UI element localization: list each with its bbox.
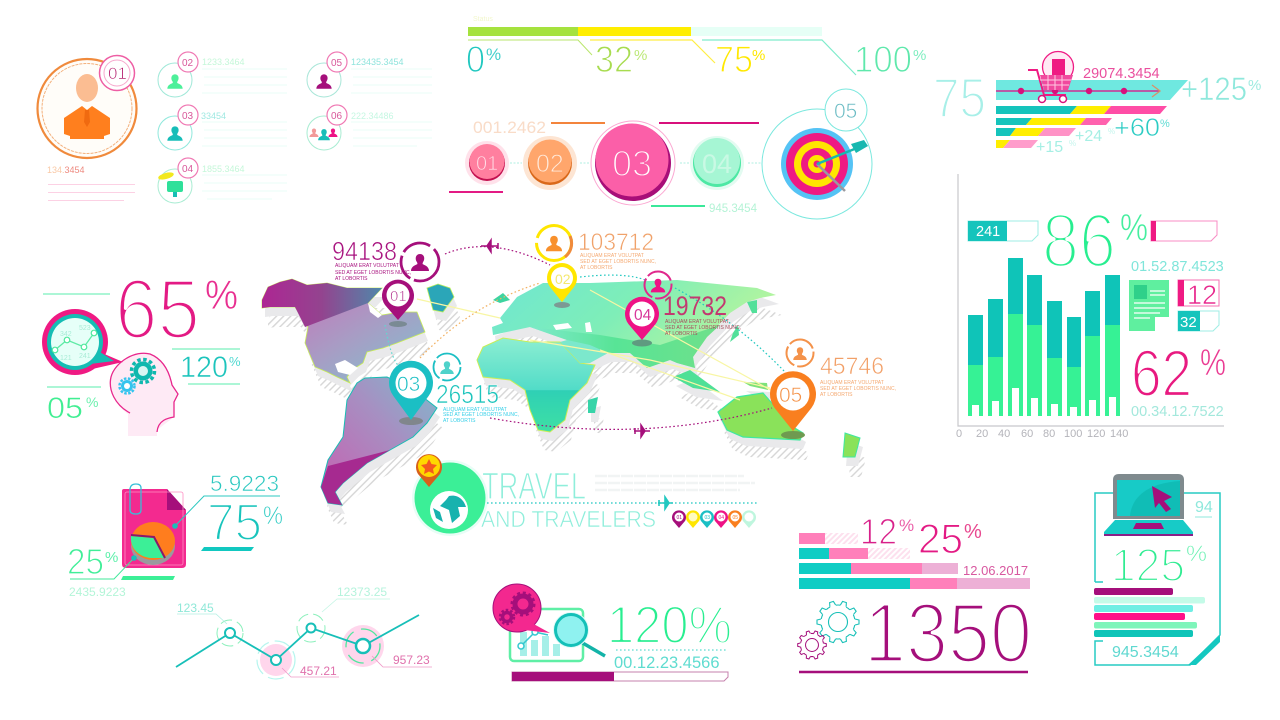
map shadow [265,288,866,525]
value: 05%: 05 [47,392,83,425]
step 02 [523,136,577,190]
label: 19732: SED AT EGET LOBORTIS NUNC, [665,325,741,331]
label: 45746: SED AT EGET LOBORTIS NUNC, [820,386,896,392]
icon: target with arrow [762,109,872,219]
label: 123.45: 123.45 [177,601,214,615]
label: 19732: ALIQUAM ERAT VOLUTPAT [665,319,729,325]
item 04 [157,158,287,203]
value: 100% [702,39,926,80]
item 03: 33454 [201,111,226,121]
bar chart: 100 [1064,428,1082,440]
panel: shopping bars [933,52,1261,156]
value: +24% [1075,127,1115,145]
list bars [1094,588,1205,637]
bar chart: 140 [1110,428,1128,440]
label: 19732: 19732 [663,291,727,321]
box: pink gauge [1151,221,1217,241]
panel: line chart [176,585,432,679]
label: 103712: AT LOBORTIS [580,265,613,271]
item 06: 06 [331,111,343,122]
value: 32%: % [634,47,647,64]
pin 05 with user ring: 05 [779,384,802,407]
icon: main person in orange ring [38,59,136,158]
value: 65%: 65 [115,262,200,356]
label: 957.23: 957.23 [393,653,430,667]
pin 02 with user ring [536,226,577,308]
panel: world map [262,226,896,525]
bar chart: 20 [976,428,988,440]
panel: bar chart right [956,174,1226,440]
value: 75%: 75 [715,39,753,80]
value: 0% [466,39,501,80]
panel: top progress bar [466,16,926,80]
label: 94138: ALIQUAM ERAT VOLUTPAT [335,263,399,269]
value: 86%: 86 [1042,199,1116,284]
bar chart: 120 [1087,428,1105,440]
value: 65%: % [205,272,238,318]
label: 26515 [436,379,519,424]
label: 94138: SED AT EGET LOBORTIS NUNC, [335,270,411,276]
label: 103712: SED AT EGET LOBORTIS NUNC, [580,259,656,265]
label: 12373.25 [322,585,390,612]
text: 945.3454: 945.3454 [709,203,758,215]
box: 12: 12 [1187,280,1217,310]
text block: main person value: 134.3454 [47,165,85,175]
panel: document with pie [67,471,283,599]
item 05: 123435.3454 [351,57,404,67]
title: AND TRAVELERS: AND TRAVELERS [481,506,656,532]
value: 75%: % [263,502,283,530]
value: 94: 94 [1195,499,1213,516]
value: 32% [468,39,647,80]
value: +125%: % [1248,77,1261,94]
value: 12%: % [899,516,914,535]
panel: stacked bars and 1350 [798,511,1032,680]
line series [176,615,419,667]
text: 01.52.87.4523: 01.52.87.4523 [1131,259,1224,275]
pin 02 with user ring: 02 [555,271,571,287]
value: +60%: % [1160,118,1170,130]
speech bubble with mini chart: 342 [60,331,72,338]
icon: speech bubble with gears [493,584,550,633]
value: 75%: 75 [207,494,262,552]
item 03 [158,105,287,150]
point halos [217,614,384,679]
leader to 75% [172,496,280,529]
banner with timeline [996,80,1188,100]
label: 45746: 45746 [820,353,884,380]
step 03: 03 [612,143,652,184]
icon: shopping cart [1028,52,1074,102]
value: 62%: % [1200,342,1226,383]
step 02: 02 [536,150,564,178]
label: 94138 [332,236,411,282]
panel: travel title [412,454,757,536]
value: 100%: % [913,47,926,64]
panel: analysis icon and 120% [493,584,732,681]
label: 103712: ALIQUAM ERAT VOLUTPAT [580,253,644,259]
value: 86%: % [1120,207,1148,249]
panel: laptop card [1094,474,1220,665]
mini pins: 04 [718,515,724,521]
badge: 01: 01 [108,64,127,83]
icon: document card [1129,280,1169,331]
label: 19732 [663,291,741,337]
panel: head with speech bubble [42,262,241,436]
item 02: 02 [182,58,194,69]
icon: head profile with gears [110,353,178,436]
value: 75%: % [752,47,765,64]
text: 00.34.12.7522: 00.34.12.7522 [1131,404,1224,420]
icon: plane top [481,240,498,252]
value: 125%: 125 [1111,539,1185,591]
label: 957.23 [372,653,432,667]
speech bubble with mini chart [42,309,123,375]
value: 25%: % [105,549,118,566]
icon: laptop with cursor [1104,474,1193,536]
item 02 [158,52,287,97]
label: 103712 [578,229,656,271]
value: +15% [1036,139,1076,156]
value: 29074.3454: 29074.3454 [1083,66,1160,82]
item 06 [307,105,432,150]
label: 12373.25: 12373.25 [337,585,387,599]
stacked bars [996,106,1167,148]
value: 5.9223: 5.9223 [210,471,279,496]
item 02: 1233.3464 [202,57,245,67]
value: 12%: 12 [860,511,897,552]
label: 19732: AT LOBORTIS [665,331,698,337]
icon: magnifier [553,612,605,656]
label: 45746 [820,353,896,398]
step 01: 01 [476,153,498,175]
label: 26515: ALIQUAM ERAT VOLUTPAT [443,407,507,413]
badge: 05: 05 [834,100,857,123]
value: 0%: % [486,45,501,64]
label: 457.21: 457.21 [300,664,337,678]
value: 25%: 25 [918,515,963,562]
value: 0%: 0 [466,39,485,80]
step 04 [690,136,744,190]
value: 32%: 32 [595,39,633,80]
pin 04 with user ring [625,272,672,346]
text: 00.12.23.4566: 00.12.23.4566 [614,654,720,672]
label: 26515: AT LOBORTIS [443,418,476,424]
label: 103712: 103712 [578,229,654,256]
value: +24%: +24 [1075,128,1102,145]
mini pins [672,510,756,528]
value: 120%: 120% [607,596,732,655]
icon: globe with pin [412,454,488,536]
box: 241: 241 [976,224,1000,240]
item 06: 222.34486 [351,111,394,121]
value: 62%: 62 [1131,336,1192,410]
value: +60%: +60 [1114,114,1160,142]
item 05: 05 [331,58,343,69]
label: 26515: 26515 [436,379,499,409]
label: 45746: AT LOBORTIS [820,392,853,398]
stacked horizontal bars [799,533,1030,589]
card outline [1095,493,1220,665]
step 01 [465,141,509,185]
value: +24%: % [1108,127,1115,136]
step 03 [591,121,675,205]
dotted line with plane [487,497,757,509]
value: 120% [172,349,241,384]
value: 120%: % [229,354,241,369]
progress bar segments: Status [473,16,493,23]
item 04: 04 [182,164,194,175]
value: +15%: % [1069,139,1076,148]
item 03: 03 [182,111,194,122]
pin 01 with user ring [382,243,439,327]
panel: profile list [38,52,432,203]
title: TRAVEL: TRAVEL [482,466,586,508]
label: 45746: ALIQUAM ERAT VOLUTPAT [820,380,884,386]
value: 1350: 1350 [864,586,1032,680]
iceland [493,293,510,303]
text: 945.3454: 945.3454 [1112,644,1179,661]
progress bar [512,672,728,681]
label: 123.45 [177,601,227,624]
box: 32: 32 [1180,314,1197,331]
progress bar segments [468,16,822,36]
value: 25%: 25 [67,541,104,582]
pin 03 with user ring: 03 [397,373,420,396]
label: 457.21 [282,664,339,678]
label: 26515: SED AT EGET LOBORTIS NUNC, [443,412,519,418]
value: +15%: +15 [1036,139,1063,156]
step 04: 04 [702,149,732,179]
text: 2435.9223: 2435.9223 [69,585,126,599]
bar chart [956,174,1224,440]
label: 94138: 94138 [332,236,397,266]
new zealand [843,433,860,457]
icon: tablet chart [510,609,583,661]
greenland [427,284,454,312]
badge: 05 [825,89,867,131]
mini pins: 01 [676,515,682,521]
value: 120%: 120 [180,351,228,384]
speech bubble with mini chart: 523 [79,325,91,332]
text: 001.2462: 001.2462 [473,118,546,137]
icon: plane bottom [634,425,650,437]
value: 75% [590,39,765,80]
value: 25%: % [964,521,982,543]
badge: 01 [100,56,134,90]
eurasia [492,280,776,368]
pale description lines [595,476,755,490]
pin 05 with user ring [770,340,816,439]
bar chart: 40 [998,428,1010,440]
bar chart: 60 [1021,428,1033,440]
text: 12.06.2017: 12.06.2017 [963,563,1028,578]
speech bubble with mini chart: 241 [79,353,91,360]
pin 04 with user ring: 04 [634,307,652,324]
north america [262,279,425,383]
pin 03 with user ring [389,354,460,425]
icon: pink document with pie and clip [122,484,186,568]
bar chart: 0 [956,428,962,440]
icon: outline gears [798,601,859,659]
panel: numbered step circles [449,89,872,219]
mini pins: 05 [732,515,738,521]
africa [477,338,595,432]
bar chart: 80 [1043,428,1055,440]
text block: main person value [47,165,135,201]
speech bubble with mini chart: 121 [60,355,72,362]
value: 05% [47,387,101,425]
box: 32 [1178,311,1219,331]
value: 05%: % [86,394,98,410]
east asia and islands [673,300,768,392]
box: 241 [968,221,1038,241]
australia [718,393,803,440]
value: +125%: +125 [1181,71,1247,107]
south america [321,377,437,505]
corner fold [1188,635,1220,665]
value: 125%: % [1186,541,1207,566]
flight connectors [385,247,785,429]
value: 25% [67,541,175,582]
label: 94138: AT LOBORTIS [335,276,368,282]
madagascar [588,397,598,413]
value: 75: 75 [933,66,986,129]
item 04: 1855.3464 [202,164,245,174]
mini pins: 03 [704,515,710,521]
pin 01 with user ring: 01 [390,288,407,305]
value: 100%: 100 [854,39,912,80]
item 05 [307,52,432,97]
